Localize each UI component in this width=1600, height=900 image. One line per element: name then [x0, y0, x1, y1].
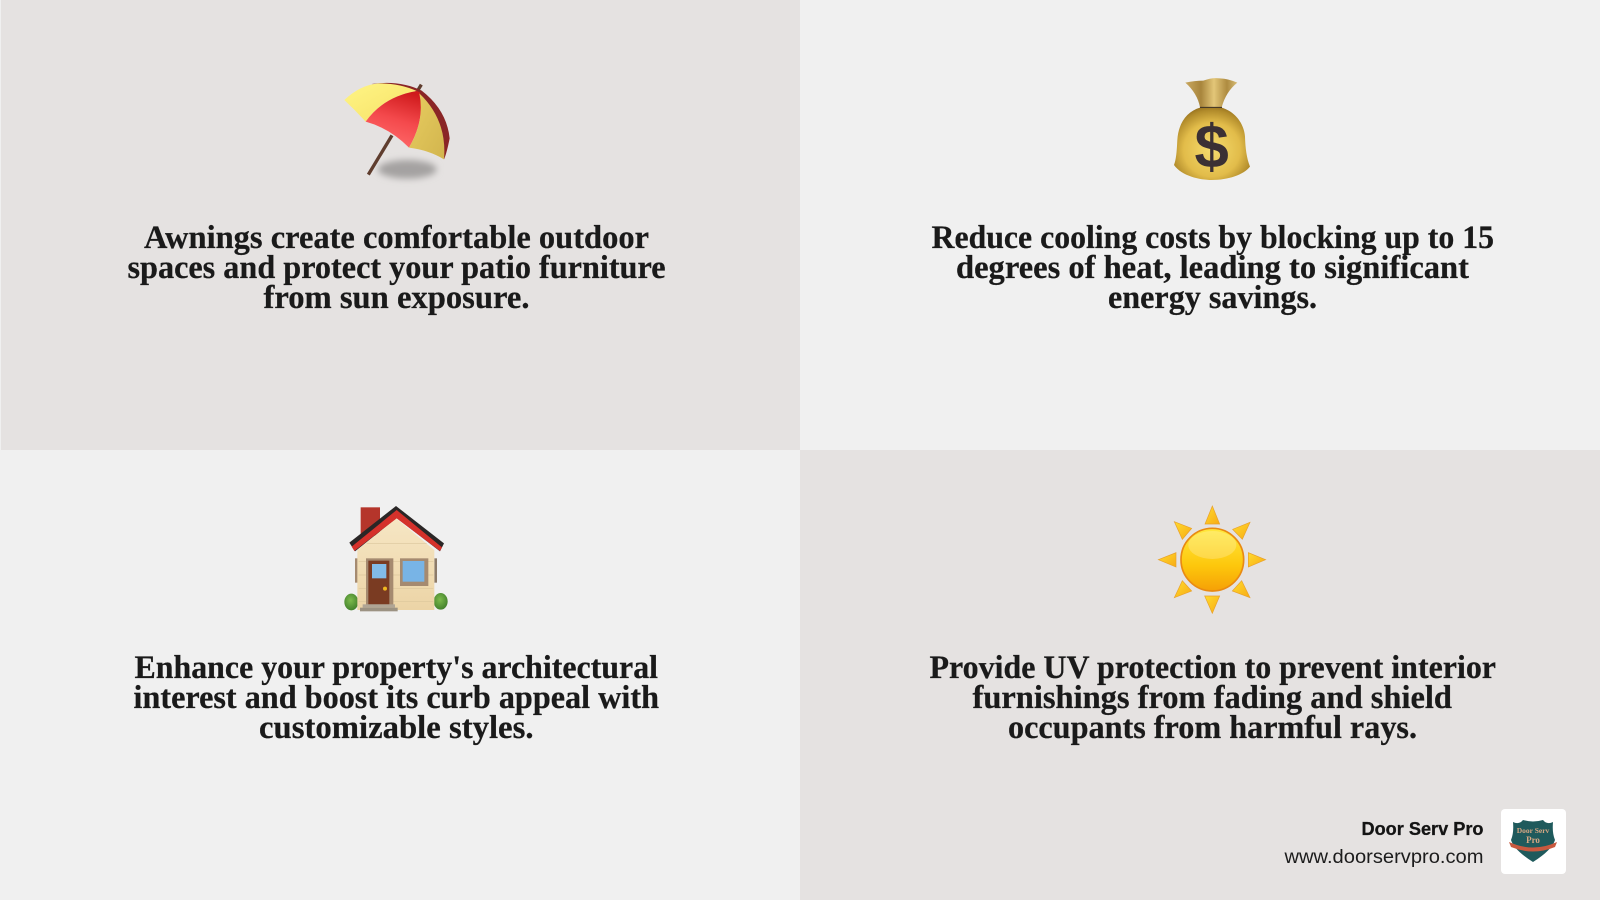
icon: house [344, 506, 448, 611]
logo badge: Pro [1526, 835, 1540, 845]
website url: www.doorservpro.com [1283, 847, 1484, 868]
panel: outdoor comfort [1, 0, 800, 450]
text: cooling savings benefit: energy savings. [1108, 280, 1317, 316]
icon: money bag [1174, 78, 1250, 181]
brand name: Door Serv Pro [1362, 819, 1484, 839]
icon: sun [1158, 506, 1266, 613]
text: cooling savings benefit: degrees of heat, leading to significant [956, 250, 1469, 286]
text: UV protection benefit: occupants from harmful rays. [1008, 710, 1417, 746]
text: UV protection benefit: Provide UV protection to prevent interior [930, 650, 1496, 686]
text: outdoor comfort benefit: spaces and protect your patio furniture [128, 250, 666, 286]
text: curb appeal benefit: customizable styles. [259, 710, 534, 746]
text: UV protection benefit: furnishings from fading and shield [972, 680, 1452, 716]
panel: UV protection [800, 450, 1600, 900]
brand footer [1283, 809, 1566, 874]
text: cooling savings benefit [932, 220, 1494, 316]
text: curb appeal benefit [134, 650, 659, 746]
text: outdoor comfort benefit: Awnings create comfortable outdoor [144, 220, 649, 256]
text: UV protection benefit [930, 650, 1496, 746]
text: curb appeal benefit: interest and boost its curb appeal with [134, 680, 659, 716]
text: outdoor comfort benefit: from sun exposure. [264, 280, 530, 316]
text: curb appeal benefit: Enhance your property's architectural [134, 650, 658, 686]
panel: cooling savings [800, 0, 1600, 450]
logo badge [1501, 809, 1566, 874]
panel: curb appeal [0, 450, 800, 900]
text: cooling savings benefit: Reduce cooling costs by blocking up to 15 [932, 220, 1494, 256]
icon: money bag: $ [1195, 112, 1229, 181]
logo badge: Door Serv [1517, 826, 1550, 835]
icon: beach umbrella [344, 83, 450, 179]
text: outdoor comfort benefit [128, 220, 666, 316]
